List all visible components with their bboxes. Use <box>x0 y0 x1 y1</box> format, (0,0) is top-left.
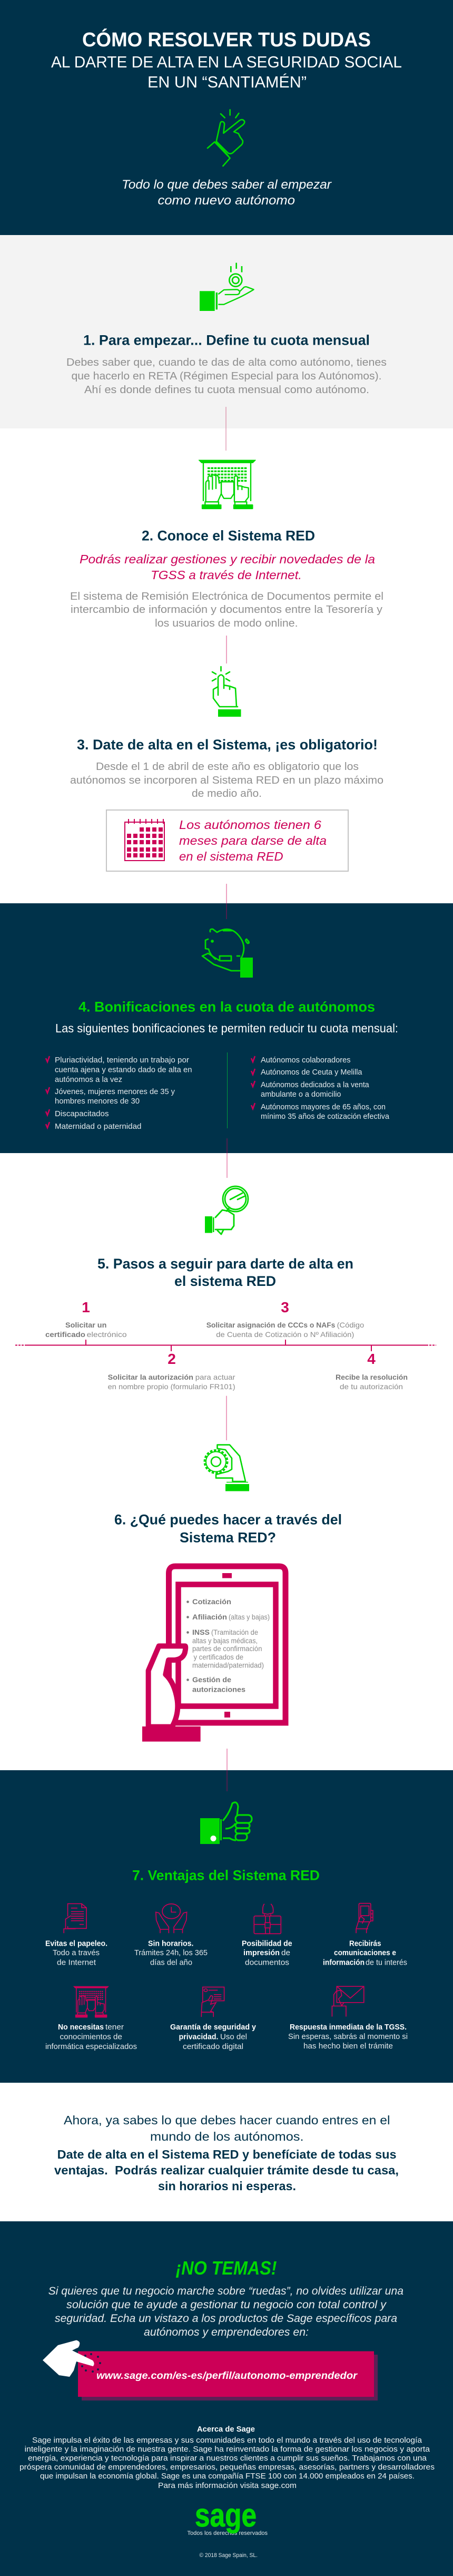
text: recommendation: autónomos y emprendedores en: <box>144 2326 309 2338</box>
advantage text 2: Trámites 24h, los 365 <box>134 1949 208 1957</box>
advantage text 5: informática especializados <box>45 2043 137 2051</box>
step 1: Solicitar un <box>65 1321 106 1329</box>
icon: clock in hands <box>156 1904 187 1933</box>
advantage text 4 <box>323 1939 407 1967</box>
advantage text 3: Posibilidad de <box>242 1939 292 1948</box>
title: EN UN “SANTIAMÉN” <box>147 73 307 91</box>
advantage text 7: Respuesta inmediata de la TGSS. <box>290 2023 407 2032</box>
list: left column: autónomos a la vez <box>55 1075 122 1084</box>
list: RED actions: Afiliación <box>192 1613 227 1621</box>
step 2: Solicitar la autorización <box>108 1373 193 1381</box>
icon: paper document <box>64 1904 86 1933</box>
step 1: 1 <box>82 1299 90 1315</box>
list: right column <box>251 1056 390 1121</box>
button: url: www.sage.com/es-es/perfil/autonomo-emprendedor <box>96 2370 358 2382</box>
list: RED actions <box>186 1597 270 1694</box>
list: RED actions: (Tramitación de <box>211 1628 258 1636</box>
timeline <box>15 1299 436 1391</box>
sage logo: Todos los derechos reservados <box>188 2530 268 2536</box>
list: left column: hombres menores de 30 <box>55 1097 140 1106</box>
about sage <box>19 2425 435 2490</box>
advantage text 5: conocimientos de <box>60 2033 122 2042</box>
text: recommendation: Si quieres que tu negocio marche sobre “ruedas”, no olvides utilizar una <box>48 2285 403 2297</box>
step 3: 3 <box>281 1299 289 1315</box>
list: left column: Maternidad o paternidad <box>55 1122 141 1131</box>
text: cuota mensual: Debes saber que, cuando te das de alta como autónomo, tienes <box>66 356 387 368</box>
step 2: 2 <box>168 1351 176 1367</box>
list: left column: Discapacitados <box>55 1109 109 1118</box>
tagline <box>122 178 332 208</box>
step 4: Recibe la resolución <box>336 1373 408 1381</box>
conclusion intro: Ahora, ya sabes lo que debes hacer cuando entres en el <box>64 2113 390 2127</box>
icon: mobile phone <box>356 1904 373 1933</box>
list: right column: Autónomos colaboradores <box>261 1056 351 1065</box>
step 2 <box>108 1351 235 1391</box>
about sage: Acerca de Sage <box>197 2425 255 2434</box>
step 3 <box>206 1299 364 1339</box>
list: left column <box>46 1056 192 1131</box>
advantage text 6 <box>170 2023 256 2051</box>
step 2: para actuar <box>195 1373 235 1381</box>
panel: 4 bonificaciones <box>0 903 453 1153</box>
list: right column: mínimo 35 años de cotización efectiva <box>261 1112 390 1121</box>
text: sistema RED: los usuarios de modo online. <box>155 617 298 629</box>
heading 7: 7. Ventajas del Sistema RED <box>132 1868 320 1884</box>
list: right column: ambulante o a domicilio <box>261 1090 341 1099</box>
tablet illustration <box>142 1566 285 1742</box>
conclusion bold: ventajas. Podrás realizar cualquier trámite desde tu casa, <box>54 2163 399 2177</box>
list: RED actions: autorizaciones <box>192 1685 245 1694</box>
icon: hand with coin <box>200 263 254 311</box>
step 3: (Código <box>337 1321 364 1329</box>
about sage: Para más información visita sage.com <box>158 2482 297 2490</box>
conclusion bold <box>54 2148 399 2193</box>
advantage text 3 <box>242 1939 292 1967</box>
icon: pointing hand <box>43 2340 101 2377</box>
advantage text 5: tener <box>105 2023 124 2032</box>
text: obligatorio <box>70 760 383 799</box>
icon: envelope in hand <box>332 1986 364 2016</box>
advantage text 2: Sin horarios. <box>148 1939 194 1948</box>
text: cuota mensual: Ahí es donde defines tu cuota mensual como autónomo. <box>84 384 369 396</box>
list: RED actions: maternidad/paternidad) <box>192 1661 264 1670</box>
advantage text 1: Evitas el papeleo. <box>45 1939 107 1948</box>
callout text <box>179 818 327 863</box>
sage logo: sage <box>195 2497 257 2534</box>
highlight text <box>80 552 375 582</box>
step 1 <box>45 1299 127 1339</box>
text: sistema RED: intercambio de información y documentos entre la Tesorería y <box>71 603 383 616</box>
list: RED actions: Cotización <box>192 1597 231 1606</box>
copyright: © 2018 Sage Spain, SL. <box>199 2552 258 2559</box>
tagline: como nuevo autónomo <box>158 193 295 208</box>
list: RED actions: y certificados de <box>194 1653 243 1661</box>
icon: hands on laptop <box>199 460 255 509</box>
advantage text 7 <box>288 2023 408 2051</box>
list: RED actions: (altas y bajas) <box>229 1613 270 1621</box>
callout text: Los autónomos tienen 6 <box>179 818 321 832</box>
icon: pointing finger <box>212 667 241 717</box>
advantage text 4: información <box>323 1959 365 1967</box>
heading 6 <box>114 1511 342 1545</box>
heading 5: el sistema RED <box>174 1273 276 1289</box>
advantage text 5 <box>45 2023 137 2051</box>
icon: calendar <box>125 819 164 861</box>
about sage: energía, experiencia y tecnología para inspirar a nuestros clientes a cumplir sus sueños. Trabajamos con una <box>28 2454 427 2463</box>
list: RED actions: Gestión de <box>192 1675 231 1684</box>
advantage text 2 <box>134 1939 208 1967</box>
icon: small laptop <box>74 1986 109 2017</box>
panel: 7 ventajas <box>0 1770 453 2083</box>
heading: no temas: ¡NO TEMAS! <box>176 2257 277 2279</box>
advantage text 7: has hecho bien el trámite <box>303 2042 393 2051</box>
advantage text 3: documentos <box>245 1959 289 1967</box>
text: obligatorio: de medio año. <box>192 787 262 799</box>
heading 6: Sistema RED? <box>180 1529 276 1545</box>
icon: piggy bank on hand <box>202 929 253 978</box>
list: right column: Autónomos de Ceuta y Melilla <box>261 1068 362 1077</box>
button: url <box>78 2351 378 2401</box>
advantage text 3: impresión <box>243 1949 280 1957</box>
heading 5: 5. Pasos a seguir para darte de alta en <box>97 1256 353 1272</box>
tagline: Todo lo que debes saber al empezar <box>122 178 332 192</box>
callout text: en el sistema RED <box>179 850 283 863</box>
icon: gear in hand <box>205 1445 249 1491</box>
conclusion intro: mundo de los autónomos. <box>150 2130 303 2143</box>
text: recommendation <box>48 2285 403 2338</box>
title <box>51 28 402 91</box>
list: RED actions: INSS <box>192 1628 210 1636</box>
highlight text: Podrás realizar gestiones y recibir novedades de la <box>80 552 375 566</box>
text: obligatorio: Desde el 1 de abril de este año es obligatorio que los <box>96 760 359 773</box>
step 4: de tu autorización <box>340 1382 403 1391</box>
step 1: certificado <box>45 1330 85 1339</box>
list: RED actions: partes de confirmación <box>192 1644 262 1653</box>
about sage: Sage impulsa el éxito de las empresas y sus comunidades en todo el mundo a través del uso de tecnología <box>32 2436 422 2445</box>
conclusion bold: sin horarios ni esperas. <box>158 2179 296 2193</box>
panel: 5 pasos <box>0 1153 453 1770</box>
step 3: Solicitar asignación de CCCs o NAFs <box>206 1321 336 1329</box>
step 1: electrónico <box>87 1330 127 1339</box>
advantage text 6: Garantía de seguridad y <box>170 2023 256 2032</box>
text: sistema RED: El sistema de Remisión Electrónica de Documentos permite el <box>70 590 383 602</box>
panel: 2 sistema RED <box>0 428 453 903</box>
text: cuota mensual: que hacerlo en RETA (Régimen Especial para los Autónomos). <box>72 370 381 382</box>
advantage text 4: comunicaciones e <box>334 1949 396 1957</box>
panel: 1 cuota mensual <box>0 235 453 428</box>
callout: 6 meses <box>106 810 348 871</box>
icon: snapping fingers <box>208 110 244 166</box>
panel: no temas <box>0 2221 453 2576</box>
heading 4: 4. Bonificaciones en la cuota de autónomos <box>78 999 375 1015</box>
advantage text 1 <box>45 1939 107 1967</box>
advantage text 4: Recibirás <box>349 1939 381 1948</box>
advantage text 6: Uso del <box>220 2033 247 2042</box>
icon: thumbs up <box>200 1802 252 1844</box>
title: CÓMO RESOLVER TUS DUDAS <box>82 28 371 51</box>
highlight text: TGSS a través de Internet. <box>151 568 302 582</box>
step 3: de Cuenta de Cotización o Nº Afiliación) <box>216 1330 354 1339</box>
about sage: que impulsan la economía global. Sage es una compañía FTSE 100 con 14.000 empleados en 24 países. <box>40 2472 415 2481</box>
heading 2: 2. Conoce el Sistema RED <box>142 528 315 544</box>
about sage: próspera comunidad de emprendedores, empresarios, pequeñas empresas, asesorías, partners y desarrolladores <box>19 2463 435 2472</box>
advantage text 1: de Internet <box>57 1959 96 1967</box>
about sage: inteligente y la imaginación de nuestra gente. Sage ha reinventado la forma de gestionar los negocios y aporta <box>25 2445 430 2454</box>
step 4: 4 <box>367 1351 376 1367</box>
text: sistema RED <box>70 590 383 629</box>
heading 3: 3. Date de alta en el Sistema, ¡es obligatorio! <box>77 737 378 753</box>
advantage text 1: Todo a través <box>53 1949 100 1957</box>
panel: conclusion <box>0 2083 453 2221</box>
icon: digital certificate <box>201 1987 224 2017</box>
icon: briefcase <box>254 1904 281 1934</box>
list: right column: Autónomos mayores de 65 años, con <box>261 1102 386 1111</box>
heading 1: 1. Para empezar... Define tu cuota mensual <box>83 332 370 348</box>
conclusion intro <box>64 2113 390 2143</box>
conclusion bold: Date de alta en el Sistema RED y benefíciate de todas sus <box>57 2148 397 2161</box>
advantage text 2: días del año <box>150 1959 192 1967</box>
advantage text 4: de tu interés <box>366 1959 407 1967</box>
advantage text 6: certificado digital <box>183 2043 243 2051</box>
heading 5 <box>97 1256 353 1289</box>
panel: header <box>0 0 453 235</box>
text: recommendation: solución que te ayude a gestionar tu negocio con total control y <box>66 2299 387 2311</box>
list: right column: Autónomos dedicados a la venta <box>261 1080 369 1089</box>
step 4 <box>336 1351 408 1391</box>
advantage text 5: No necesitas <box>58 2023 104 2032</box>
list: left column: Jóvenes, mujeres menores de 35 y <box>55 1087 175 1096</box>
list: left column: cuenta ajena y estando dado de alta en <box>55 1066 192 1074</box>
advantage text 3: de <box>281 1949 290 1957</box>
advantage text 7: Sin esperas, sabrás al momento si <box>288 2033 408 2041</box>
list: left column: Pluriactividad, teniendo un trabajo por <box>55 1056 189 1065</box>
list: RED actions: altas y bajas médicas, <box>192 1636 258 1645</box>
callout text: meses para darse de alta <box>179 834 327 847</box>
icon: magnifier in hand <box>205 1186 248 1234</box>
step 2: en nombre propio (formulario FR101) <box>108 1382 235 1391</box>
text: cuota mensual <box>66 356 387 396</box>
subheading: Las siguientes bonificaciones te permiten reducir tu cuota mensual: <box>55 1021 398 1035</box>
text: obligatorio: autónomos se incorporen al Sistema RED en un plazo máximo <box>70 774 383 786</box>
title: AL DARTE DE ALTA EN LA SEGURIDAD SOCIAL <box>51 53 402 71</box>
text: recommendation: seguridad. Echa un vistazo a los productos de Sage específicos para <box>55 2312 397 2325</box>
hand holding tablet <box>142 1646 201 1742</box>
heading 6: 6. ¿Qué puedes hacer a través del <box>114 1511 342 1527</box>
advantage text 6: privacidad. <box>179 2033 218 2042</box>
